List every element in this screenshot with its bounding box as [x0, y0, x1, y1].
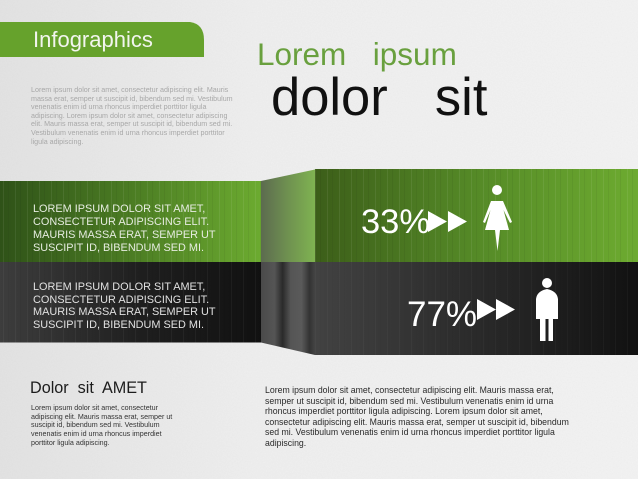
- right dark band: [315, 262, 638, 355]
- arrows: dark band: [477, 299, 515, 320]
- tab title: Infographics: [33, 27, 153, 52]
- icon: man: [536, 278, 558, 341]
- right green band: [315, 169, 638, 262]
- icon: woman: [483, 185, 512, 251]
- lower right paragraph: Lorem ipsum dolor sit amet, consectetur adipiscing elit. Mauris massa erat, semper ut suscipit id, bibendum sed mi. Vestibulum venenatis enim id urna rhoncus imperdiet porttitor ligula adipiscing. Lorem ipsum dolor sit amet, consectetur adipiscing elit. Mauris massa erat, semper ut suscipit id, bibendum sed mi. Vestibulum venenatis enim id urna rhoncus imperdiet porttitor ligula adipiscing.: [265, 385, 569, 448]
- stat: 33%: 33%: [361, 202, 430, 240]
- lower left paragraph: Lorem ipsum dolor sit amet, consectetur adipiscing elit. Mauris massa erat, semper ut suscipit id, bibendum sed mi. Vestibulum venenatis enim id urna rhoncus imperdiet porttitor ligula adipiscing.: [31, 404, 172, 447]
- dark band text: LOREM IPSUM DOLOR SIT AMET, CONSECTETUR ADIPISCING ELIT. MAURIS MASSA ERAT, SEMPER UT SUSCIPIT ID, BIBENDUM SED MI.: [33, 281, 216, 331]
- left dark band: [0, 262, 262, 342]
- folded dark band: [261, 262, 315, 355]
- header tab: [0, 22, 204, 57]
- heading: dolor sit: dolor sit: [271, 68, 487, 127]
- heading: Lorem ipsum: Lorem ipsum: [257, 36, 457, 72]
- intro paragraph: Lorem ipsum dolor sit amet, consectetur adipiscing elit. Mauris massa erat, semper ut suscipit id, bibendum sed mi. Vestibulum venenatis enim id urna rhoncus imperdiet porttitor ligula adipiscing. Lorem ipsum dolor sit amet, consectetur adipiscing elit. Mauris massa erat, semper ut suscipit id, bibendum sed mi. Vestibulum venenatis enim id urna rhoncus imperdiet porttitor ligula adipiscing.: [31, 86, 233, 146]
- subheading: Dolor sit AMET: Dolor sit AMET: [30, 379, 147, 397]
- folded green band: [261, 170, 315, 262]
- arrows: green band: [428, 211, 467, 232]
- green band text: LOREM IPSUM DOLOR SIT AMET, CONSECTETUR ADIPISCING ELIT. MAURIS MASSA ERAT, SEMPER UT SUSCIPIT ID, BIBENDUM SED MI.: [33, 203, 216, 254]
- stat: 77%: 77%: [407, 295, 477, 334]
- left green band: [0, 181, 261, 262]
